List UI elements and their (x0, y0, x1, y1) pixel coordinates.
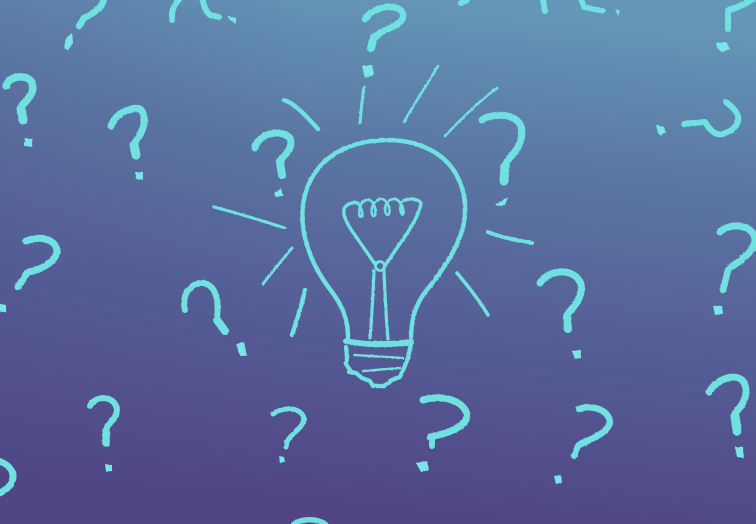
filament stems (370, 271, 388, 339)
question mark: lower left (90, 398, 117, 472)
question mark: bottom partial (293, 520, 326, 524)
question mark: sideways at right (656, 102, 738, 135)
question mark: upper left (6, 77, 33, 147)
filament support triangle (344, 199, 421, 264)
question mark: top centre (362, 7, 403, 78)
question mark: bottom centre left (273, 409, 304, 463)
bulb glass outline (302, 140, 465, 340)
screw thread lines (354, 355, 403, 371)
question mark: bottom right (554, 407, 610, 484)
question mark: lower right of bulb (540, 272, 581, 359)
question mark: bottom left partial (0, 461, 13, 494)
question mark: bottom centre (416, 398, 467, 472)
filament coil (352, 199, 405, 217)
question mark: upper left second (111, 108, 144, 180)
question mark: top right (716, 0, 752, 52)
question mark: left of bulb (255, 133, 291, 197)
question mark: top partial (172, 0, 236, 24)
screw collar (346, 341, 411, 344)
question mark: top left partial (64, 0, 104, 50)
question mark: lower left of bulb (184, 283, 247, 356)
question mark: right edge (713, 226, 755, 315)
question mark: lower right edge (709, 377, 746, 458)
screw base (346, 344, 411, 386)
icon: light bulb (302, 140, 465, 386)
question mark: right of bulb (482, 115, 522, 206)
question mark: mid left (0, 238, 57, 312)
question mark: top centre right partials (461, 0, 620, 16)
filament knot (376, 262, 384, 270)
rays around the bulb (214, 66, 532, 335)
